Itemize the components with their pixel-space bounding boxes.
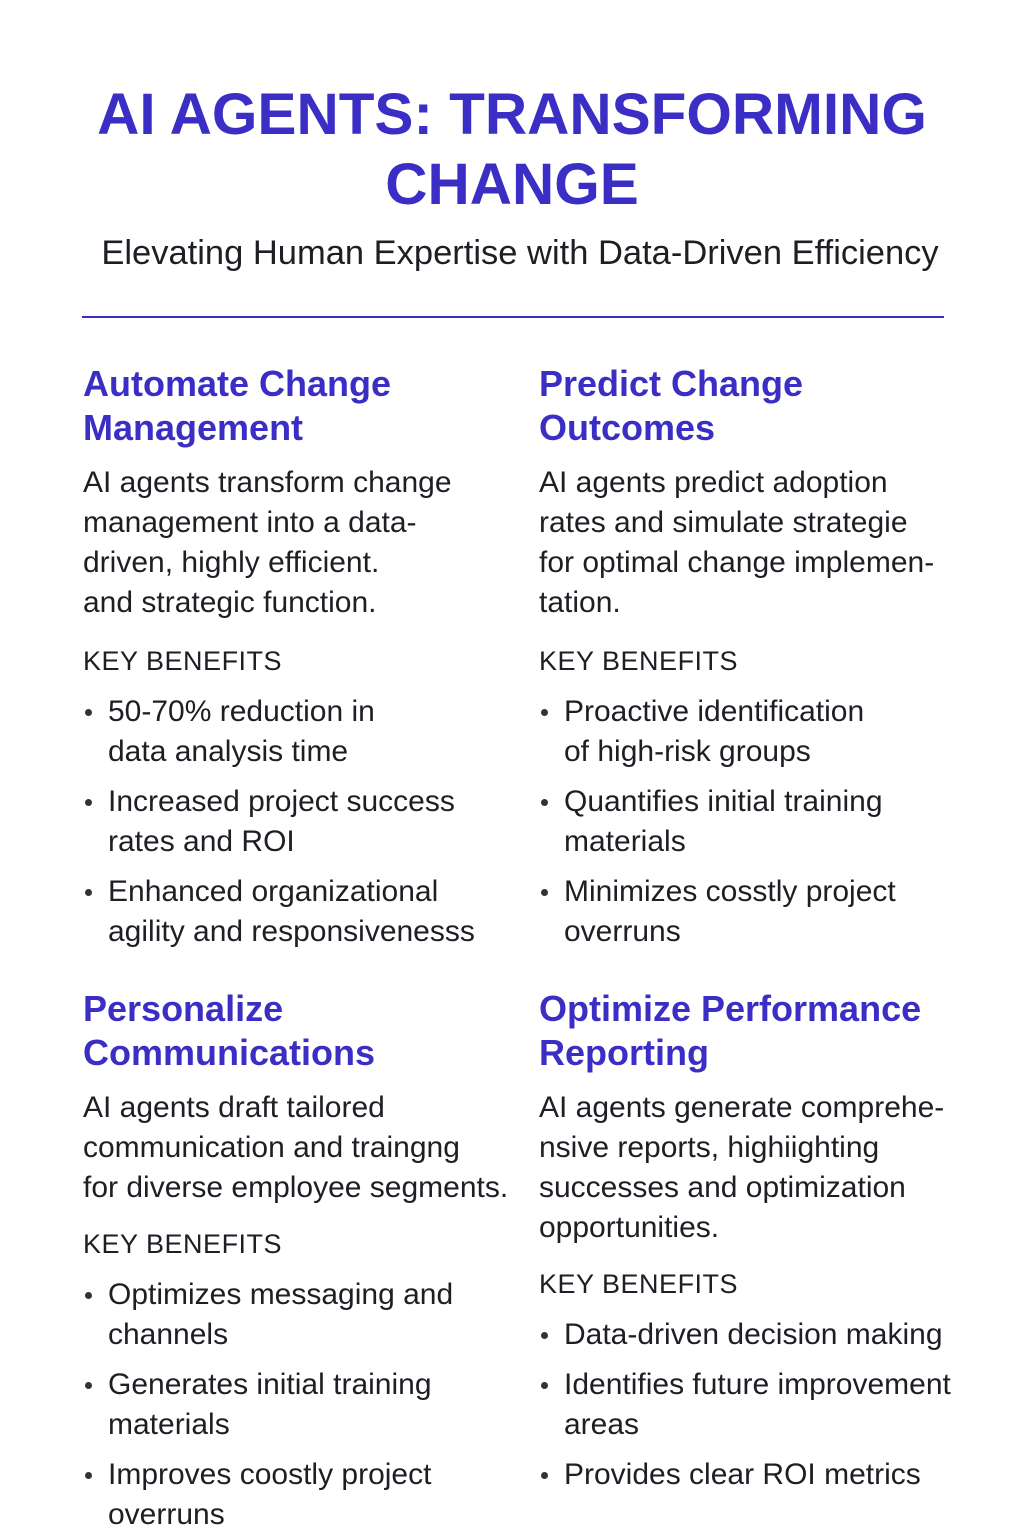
panel: personalize communications xyxy=(83,988,508,1531)
body text: management into a data- xyxy=(83,506,417,539)
heading: Outcomes xyxy=(539,407,715,448)
body text: AI agents generate comprehe- xyxy=(539,1091,944,1124)
title xyxy=(97,82,927,217)
bullets: agility and responsivenesss xyxy=(108,915,475,948)
body text: opportunities. xyxy=(539,1211,719,1244)
panel: optimize performance reporting xyxy=(539,988,951,1491)
bullets xyxy=(541,695,896,948)
body text: nsive reports, highiighting xyxy=(539,1131,879,1164)
body text: and strategic function. xyxy=(83,586,377,619)
bullets: Improves coostly project xyxy=(108,1458,431,1491)
subtitle: Elevating Human Expertise with Data-Driven Efficiency xyxy=(101,234,939,272)
heading: Communications xyxy=(83,1032,375,1073)
bullets: channels xyxy=(108,1318,228,1351)
body text: AI agents transform change xyxy=(83,466,452,499)
heading: Management xyxy=(83,407,303,448)
panel: automate change management xyxy=(83,363,475,948)
heading: Reporting xyxy=(539,1032,709,1073)
bullets: Quantifies initial training xyxy=(564,785,883,818)
bullets: Identifies future improvement xyxy=(564,1368,951,1401)
bullets: Generates initial training xyxy=(108,1368,432,1401)
bullets: areas xyxy=(564,1408,639,1441)
heading xyxy=(83,363,391,448)
bullets: Optimizes messaging and xyxy=(108,1278,453,1311)
heading: Optimize Performance xyxy=(539,988,921,1029)
bullets xyxy=(85,1278,453,1531)
body text: AI agents draft tailored xyxy=(83,1091,385,1124)
bullets: materials xyxy=(564,825,686,858)
heading xyxy=(539,363,803,448)
body text: rates and simulate strategie xyxy=(539,506,908,539)
body text: tation. xyxy=(539,586,621,619)
bullets: materials xyxy=(108,1408,230,1441)
bullets: of high-risk groups xyxy=(564,735,811,768)
bullets xyxy=(541,1318,951,1491)
body text: for diverse employee segments. xyxy=(83,1171,508,1204)
body text: successes and optimization xyxy=(539,1171,906,1204)
bullets: Increased project success xyxy=(108,785,455,818)
body text: driven, highly efficient. xyxy=(83,546,379,579)
heading xyxy=(83,988,375,1073)
body text xyxy=(83,466,452,619)
bullets: Data-driven decision making xyxy=(564,1318,943,1351)
bullets: Minimizes cosstly project xyxy=(564,875,896,908)
key benefits: KEY BENEFITS xyxy=(83,646,282,676)
body text: communication and traingng xyxy=(83,1131,460,1164)
title: CHANGE xyxy=(385,152,639,217)
key benefits: KEY BENEFITS xyxy=(539,1269,738,1299)
heading: Automate Change xyxy=(83,363,391,404)
body text: AI agents predict adoption xyxy=(539,466,888,499)
key benefits: KEY BENEFITS xyxy=(539,646,738,676)
bullets: overruns xyxy=(108,1498,225,1531)
heading xyxy=(539,988,921,1073)
bullets: 50-70% reduction in xyxy=(108,695,375,728)
bullets: rates and ROI xyxy=(108,825,295,858)
bullets: Enhanced organizational xyxy=(108,875,438,908)
title: AI AGENTS: TRANSFORMING xyxy=(97,82,927,147)
bullets: data analysis time xyxy=(108,735,348,768)
heading: Personalize xyxy=(83,988,283,1029)
bullets: overruns xyxy=(564,915,681,948)
body text xyxy=(539,466,934,619)
body text: for optimal change implemen- xyxy=(539,546,934,579)
body text xyxy=(539,1091,944,1244)
bullets: Proactive identification xyxy=(564,695,864,728)
key benefits: KEY BENEFITS xyxy=(83,1229,282,1259)
panel: predict change outcomes xyxy=(539,363,934,948)
heading: Predict Change xyxy=(539,363,803,404)
body text xyxy=(83,1091,508,1204)
bullets xyxy=(85,695,475,948)
bullets: Provides clear ROI metrics xyxy=(564,1458,921,1491)
